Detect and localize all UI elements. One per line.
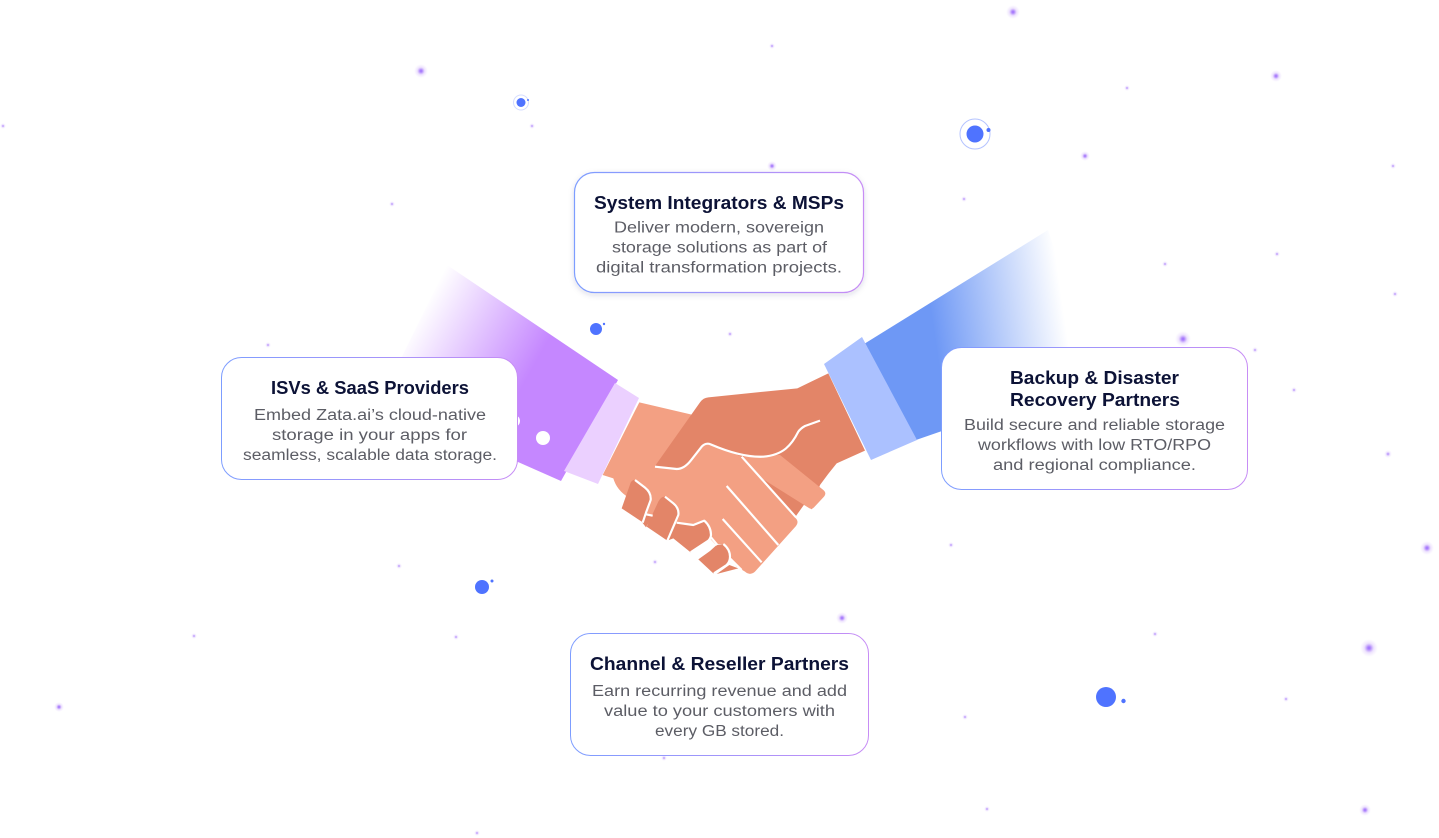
card: System Integrators & MSPs xyxy=(574,172,864,292)
card: System Integrators & MSPs: digital transformation projects. xyxy=(596,260,842,276)
card: ISVs & SaaS Providers: ISVs & SaaS Providers xyxy=(271,377,469,398)
blue orbit dots xyxy=(475,95,1126,707)
card: Backup & Disaster Recovery Partners: workflows with low RTO/RPO xyxy=(977,437,1211,454)
card: Backup & Disaster Recovery Partners: and regional compliance. xyxy=(993,457,1196,474)
card: Channel & Reseller Partners: value to your customers with xyxy=(604,703,835,720)
card: Channel & Reseller Partners: Earn recurring revenue and add xyxy=(592,683,847,700)
card: System Integrators & MSPs: System Integrators & MSPs xyxy=(594,192,844,213)
card: Channel & Reseller Partners: every GB stored. xyxy=(655,723,784,740)
card: Channel & Reseller Partners xyxy=(570,634,868,756)
left forearm xyxy=(603,402,733,537)
left cuff xyxy=(564,383,639,484)
right sleeve xyxy=(864,230,1085,440)
card: System Integrators & MSPs: storage solutions as part of xyxy=(612,240,828,256)
card: Backup & Disaster Recovery Partners: Build secure and reliable storage xyxy=(964,417,1225,434)
right hand xyxy=(655,373,865,516)
white hand contour lines xyxy=(635,421,820,573)
card: ISVs & SaaS Providers: Embed Zata.ai’s cloud-native xyxy=(254,407,486,424)
left sleeve xyxy=(380,265,618,481)
right thumb xyxy=(742,455,825,509)
card: Channel & Reseller Partners: Channel & Reseller Partners xyxy=(590,653,849,674)
card: Backup & Disaster Recovery Partners xyxy=(942,348,1248,490)
card: ISVs & SaaS Providers: seamless, scalable data storage. xyxy=(243,447,497,464)
card: System Integrators & MSPs: Deliver modern, sovereign xyxy=(614,220,824,236)
left palm xyxy=(655,444,798,574)
dark fingers xyxy=(622,480,738,574)
handshake illustration xyxy=(603,373,865,574)
right cuff xyxy=(824,337,917,460)
card: ISVs & SaaS Providers: storage in your apps for xyxy=(272,427,467,444)
card: ISVs & SaaS Providers xyxy=(222,358,518,480)
card: Backup & Disaster Recovery Partners: Backup & Disaster xyxy=(1010,367,1179,388)
card: Backup & Disaster Recovery Partners: Recovery Partners xyxy=(1010,389,1180,410)
